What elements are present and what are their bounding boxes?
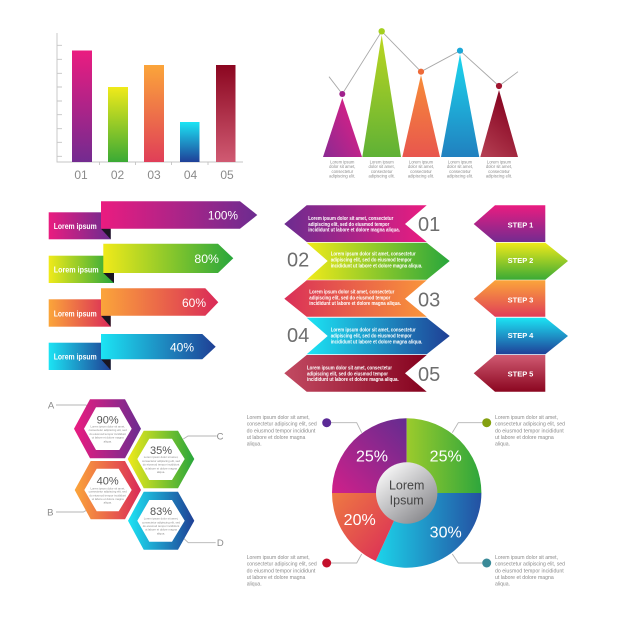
callout text top right: do eiusmod tempor incididunt xyxy=(495,428,564,434)
segment percentages: 25% xyxy=(430,448,462,466)
step 5 xyxy=(474,355,545,392)
triangle captions: dolor sit amet, xyxy=(329,164,355,169)
hexagon B 40%: consectetur adipiscing elit, sed xyxy=(89,490,127,494)
ribbon 60% xyxy=(49,288,218,327)
callout text top left: aliqua. xyxy=(247,442,262,448)
hexagon A 90%: aliqua. xyxy=(104,439,112,443)
arrow row 02: 02 xyxy=(287,250,309,272)
callout text bottom left: Lorem ipsum dolor sit amet, xyxy=(247,555,310,561)
callout text bottom right: consectetur adipiscing elit, sed xyxy=(495,562,565,568)
triangle captions: dolor sit amet, xyxy=(486,164,512,169)
hexagon B 40% xyxy=(75,461,141,519)
triangle captions: Lorem ipsum xyxy=(448,160,473,164)
segment green 25% xyxy=(407,418,481,493)
hexagon A 90%: do eiusmod tempor incididunt xyxy=(89,432,126,436)
arrow row 04: adipiscing elit, sed do eiusmod tempor xyxy=(331,334,412,340)
callout text top right: aliqua. xyxy=(495,442,510,448)
arrow row 03 xyxy=(284,280,440,317)
bar labels: 04 xyxy=(184,168,197,182)
hexagon C 35%: consectetur adipiscing elit, sed xyxy=(142,459,180,463)
arrow row 04 xyxy=(287,318,450,354)
arrow row 04: Lorem ipsum dolor sit amet, consectetur xyxy=(331,328,416,334)
hexagon A 90%: consectetur adipiscing elit, sed xyxy=(89,428,127,432)
bar 03 xyxy=(144,65,164,162)
triangle captions: adipiscing elit. xyxy=(486,174,512,179)
callout text top left xyxy=(247,415,317,448)
hexagon D 83%: consectetur adipiscing elit, sed xyxy=(142,520,180,524)
callout leader lines xyxy=(331,423,482,563)
bar 04 xyxy=(180,122,200,162)
hexagon D 83%: 83% xyxy=(150,506,172,518)
hexagon A 90%: ut labore et dolore magna xyxy=(92,436,124,440)
arrow row 03: incididunt ut labore et dolore magna aliqua. xyxy=(309,301,401,307)
triangle captions: adipiscing elit. xyxy=(447,174,473,179)
ribbon 40%: 40% xyxy=(170,340,194,354)
step 1 xyxy=(474,205,545,242)
triangle captions: adipiscing elit. xyxy=(329,174,355,179)
bar labels: 05 xyxy=(220,168,234,182)
triangle 2 xyxy=(362,35,401,157)
leader lines xyxy=(56,405,217,543)
arrow row 05: Lorem ipsum dolor sit amet, consectetur xyxy=(307,366,393,372)
arrow row 04: incididunt ut labore et dolore magna aliqua. xyxy=(331,339,423,345)
arrow row 01 xyxy=(284,205,440,242)
callout text top left: do eiusmod tempor incididunt xyxy=(247,428,316,434)
arrow row 03: adipiscing elit, sed do eiusmod tempor xyxy=(309,295,391,301)
bar 02 xyxy=(108,87,128,162)
segment percentages: 20% xyxy=(344,512,376,529)
numbered arrow list xyxy=(284,205,450,392)
center circle xyxy=(376,462,437,524)
segment percentages: 30% xyxy=(430,525,462,542)
callout text bottom left: do eiusmod tempor incididunt xyxy=(247,568,316,574)
callout text top right: consectetur adipiscing elit, sed xyxy=(495,422,565,428)
step 2 xyxy=(496,243,568,280)
callout text top right xyxy=(495,415,565,448)
callout text top left: ut labore et dolore magna xyxy=(247,435,306,441)
connecting line xyxy=(329,31,518,94)
hexagon C 35%: 35% xyxy=(150,445,172,457)
step 3: STEP 3 xyxy=(508,295,533,304)
callout text top left: Lorem ipsum dolor sit amet, xyxy=(247,415,310,421)
segment percentages xyxy=(344,448,462,542)
triangle captions: dolor sit amet, xyxy=(369,164,395,169)
triangle captions: consectetur xyxy=(449,169,471,174)
hexagon B 40%: 40% xyxy=(97,475,119,487)
bar labels xyxy=(74,168,234,182)
callout text bottom right: ut labore et dolore magna xyxy=(495,575,554,581)
callout text top left: consectetur adipiscing elit, sed xyxy=(247,422,317,428)
triangle captions: dolor sit amet, xyxy=(408,164,434,169)
triangle 3 xyxy=(402,75,440,157)
hexagon C 35%: do eiusmod tempor incididunt xyxy=(143,463,179,467)
arrow row 01: adipiscing elit, sed do eiusmod tempor xyxy=(308,222,390,228)
hexagon B 40%: ut labore et dolore magna xyxy=(92,497,124,501)
triangle 5 xyxy=(480,90,518,157)
arrow row 05 xyxy=(284,355,440,392)
hexagon B 40%: do eiusmod tempor incididunt xyxy=(89,493,126,497)
step arrows xyxy=(474,205,568,392)
bar chart xyxy=(57,33,243,182)
arrow row 03: 03 xyxy=(418,290,440,312)
hexagon letters xyxy=(47,400,224,549)
hexagon letters: C xyxy=(217,432,224,442)
callout text bottom left: ut labore et dolore magna xyxy=(247,575,306,581)
triangle captions: adipiscing elit. xyxy=(369,174,395,179)
callout text top right: ut labore et dolore magna xyxy=(495,435,554,441)
hexagon letters: B xyxy=(47,508,53,518)
hexagon C 35% xyxy=(128,431,194,488)
callout text top right: Lorem ipsum dolor sit amet, xyxy=(495,415,558,421)
segment percentages: 25% xyxy=(356,448,388,466)
step 4 xyxy=(496,318,568,354)
center label: Lorem xyxy=(389,478,424,492)
arrow row 02: Lorem ipsum dolor sit amet, consectetur xyxy=(331,252,416,258)
triangle captions: consectetur xyxy=(410,169,432,174)
triangle captions: consectetur xyxy=(371,169,393,174)
hexagon D 83%: ut labore et dolore magna xyxy=(145,528,177,532)
hexagon C 35%: ut labore et dolore magna xyxy=(145,466,177,470)
center label: Ipsum xyxy=(390,494,424,508)
bar labels: 02 xyxy=(111,168,124,182)
ribbon percentage bars xyxy=(49,201,257,370)
peak markers xyxy=(339,28,502,97)
donut chart with callouts xyxy=(247,415,565,588)
hexagon A 90%: 90% xyxy=(97,414,119,426)
arrow row 02: incididunt ut labore et dolore magna aliqua. xyxy=(331,264,423,270)
hexagon D 83% xyxy=(128,492,194,550)
ribbon 60%: 60% xyxy=(182,296,206,310)
hexagon D 83%: aliqua. xyxy=(157,532,165,536)
step 2: STEP 2 xyxy=(508,256,533,265)
hexagon D 83%: Lorem ipsum dolor sit amet, xyxy=(144,517,178,521)
hexagon C 35%: Lorem ipsum dolor sit amet, xyxy=(144,455,178,459)
step 4: STEP 4 xyxy=(508,331,534,340)
hexagon letters: D xyxy=(217,538,224,549)
ribbon 40%: Lorem ipsum xyxy=(54,353,97,362)
hexagon A 90% xyxy=(74,399,141,458)
arrow row 05: incididunt ut labore et dolore magna aliqua. xyxy=(307,377,399,383)
arrow row 05: adipiscing elit, sed do eiusmod tempor xyxy=(307,371,389,377)
arrow row 02: adipiscing elit, sed do eiusmod tempor xyxy=(331,258,412,264)
segment purple 25% xyxy=(332,418,407,493)
hexagon B 40%: aliqua. xyxy=(104,501,112,505)
bar labels: 03 xyxy=(147,168,161,182)
arrow row 01: Lorem ipsum dolor sit amet, consectetur xyxy=(308,216,394,222)
center label xyxy=(389,478,424,508)
callout text bottom left: consectetur adipiscing elit, sed xyxy=(247,562,317,568)
triangle peak chart xyxy=(323,28,518,179)
hexagon cluster xyxy=(47,399,224,550)
hexagon D 83%: do eiusmod tempor incididunt xyxy=(143,524,179,528)
triangle captions xyxy=(329,160,512,179)
ribbon 80%: Lorem ipsum xyxy=(54,266,99,275)
ribbon 80%: 80% xyxy=(194,252,219,266)
arrow row 02 xyxy=(287,243,450,280)
callout text bottom left: aliqua. xyxy=(247,582,262,588)
bar 01 xyxy=(72,50,92,162)
triangle captions: Lorem ipsum xyxy=(370,160,394,164)
ribbon 100% xyxy=(49,201,257,239)
callout text bottom right: do eiusmod tempor incididunt xyxy=(495,568,564,574)
callout text bottom right: Lorem ipsum dolor sit amet, xyxy=(495,555,558,561)
triangle captions: Lorem ipsum xyxy=(487,160,512,164)
arrow row 01: 01 xyxy=(418,214,440,236)
step 5: STEP 5 xyxy=(508,369,533,378)
callout dots xyxy=(322,418,491,568)
segment blue 30% xyxy=(376,493,481,568)
ribbon 80% xyxy=(49,244,233,283)
ribbon 40% xyxy=(49,334,216,370)
callout text bottom right: aliqua. xyxy=(495,582,510,588)
step 1: STEP 1 xyxy=(508,220,533,230)
arrow row 04: 04 xyxy=(287,325,309,347)
arrow row 03: Lorem ipsum dolor sit amet, consectetur xyxy=(309,290,395,296)
ribbon 60%: Lorem ipsum xyxy=(54,309,97,318)
triangle captions: Lorem ipsum xyxy=(330,160,355,164)
triangle 4 xyxy=(441,54,479,157)
arrow row 05: 05 xyxy=(418,364,440,386)
segment red 20% xyxy=(332,493,407,561)
arrow row 01: incididunt ut labore et dolore magna aliqua. xyxy=(308,228,400,234)
bar chart axes xyxy=(57,33,243,165)
bar labels: 01 xyxy=(74,168,88,182)
hexagon letters: A xyxy=(48,400,55,412)
step 3 xyxy=(474,280,545,317)
triangle captions: consectetur xyxy=(488,169,510,174)
triangle captions: consectetur xyxy=(331,169,354,174)
triangle 1 xyxy=(323,98,362,157)
callout text bottom left xyxy=(247,555,317,588)
hexagon B 40%: Lorem ipsum dolor sit amet, xyxy=(90,486,125,490)
ribbon 100%: 100% xyxy=(208,208,238,222)
triangle captions: adipiscing elit. xyxy=(408,174,434,179)
ribbon 100%: Lorem ipsum xyxy=(54,222,97,231)
hexagon A 90%: Lorem ipsum dolor sit amet, xyxy=(90,425,125,429)
callout text bottom right xyxy=(495,555,565,588)
hexagon C 35%: aliqua. xyxy=(157,470,165,474)
triangle captions: Lorem ipsum xyxy=(409,160,434,164)
triangle captions: dolor sit amet, xyxy=(447,164,473,169)
bar 05 xyxy=(216,65,236,162)
